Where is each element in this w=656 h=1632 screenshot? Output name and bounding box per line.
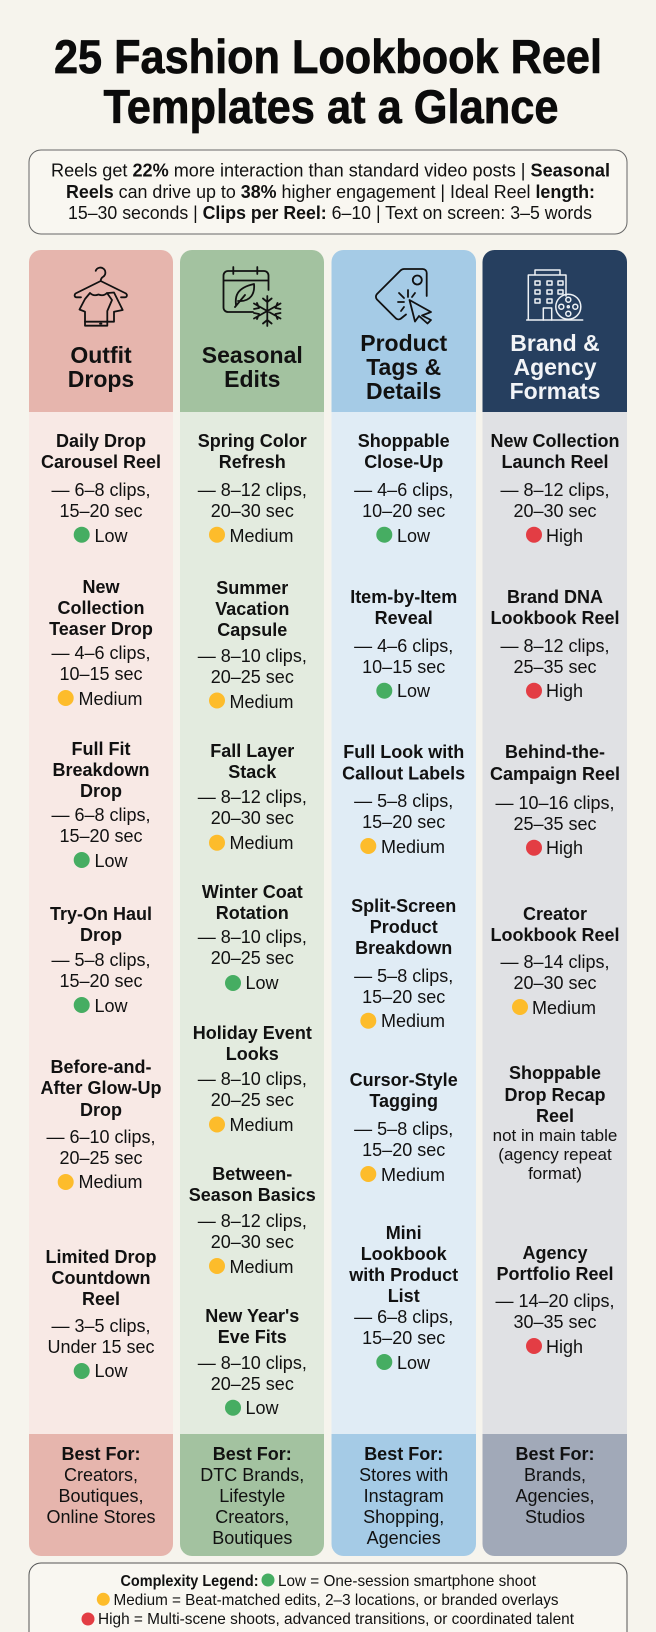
template: Between-Season Basics [189,1164,316,1277]
template: Cursor-Style Tagging: Cursor-Style [350,1070,458,1090]
template: Mini Lookbook with Product List: Lookbook [361,1244,448,1264]
template: Shoppable Drop Recap Reel: not in main table [493,1126,617,1145]
template: Spring Color Refresh: 20–30 sec [211,501,294,521]
template: Behind-the-Campaign Reel: — 10–16 clips, [495,793,615,813]
template: Fall Layer Stack [198,741,307,853]
template: Limited Drop Countdown Reel: Reel [82,1289,120,1309]
template: Try-On Haul Drop [50,904,152,1016]
template: Full Look with Callout Labels: Medium [381,837,445,857]
template: Winter Coat Rotation: Rotation [216,903,289,923]
template: Limited Drop Countdown Reel: Low [94,1361,129,1381]
panel: Outfit Drops [29,250,173,1556]
template: Split-Screen Product Breakdown: 15–20 sec [362,987,445,1007]
title [54,30,602,133]
template: Split-Screen Product Breakdown: Product [370,917,438,937]
template: New Collection Teaser Drop: 10–15 sec [59,664,143,684]
template: Spring Color Refresh: — 8–12 clips, [198,480,307,500]
template: Spring Color Refresh: Spring Color [198,431,307,451]
template: Full Fit Breakdown Drop: 15–20 sec [59,826,143,846]
template: Behind-the-Campaign Reel: Campaign Reel [490,764,620,784]
best for: Product Tags & Details: Shopping, [363,1507,444,1527]
template: New Collection Launch Reel [490,431,620,546]
template: Try-On Haul Drop: Try-On Haul [50,904,152,924]
template: Fall Layer Stack: 20–30 sec [211,808,294,828]
template: Between-Season Basics: 20–30 sec [211,1232,294,1252]
best for: Seasonal Edits [180,1434,324,1556]
template: Summer Vacation Capsule: Vacation [215,599,289,619]
best for: Product Tags & Details: Instagram [364,1486,444,1506]
template: Creator Lookbook Reel [490,904,620,1018]
template: Winter Coat Rotation [198,882,307,993]
template: Fall Layer Stack: Fall Layer [210,741,294,761]
template: New Year's Eve Fits: New Year's [205,1306,299,1326]
template: Creator Lookbook Reel: Creator [523,904,587,924]
template: New Year's Eve Fits: Low [246,1398,280,1418]
template: Shoppable Close-Up: Close-Up [364,452,443,472]
template: Split-Screen Product Breakdown: Medium [381,1011,445,1031]
template: Item-by-Item Reveal [350,587,457,701]
template: Spring Color Refresh: Medium [230,526,294,546]
template: Winter Coat Rotation: Winter Coat [202,882,303,902]
template: Summer Vacation Capsule: Summer [216,578,288,598]
template: Full Fit Breakdown Drop: Drop [80,781,122,801]
column header: Outfit Drops [29,250,173,412]
template: Full Look with Callout Labels: Full Look with [343,742,464,762]
column header: Outfit Drops: Outfit [70,342,132,368]
template: New Collection Launch Reel: High [546,526,583,546]
template: Shoppable Close-Up: — 4–6 clips, [354,480,453,500]
best for: Seasonal Edits: Lifestyle [219,1486,285,1506]
panel: Product Tags & Details [332,250,476,1556]
template: Shoppable Close-Up: Shoppable [358,431,450,451]
column header: Product Tags & Details: Product [360,330,447,356]
template: Daily Drop Carousel Reel: Daily Drop [56,431,146,451]
template: Spring Color Refresh [198,431,307,546]
template: Winter Coat Rotation: Low [246,973,280,993]
template: Full Look with Callout Labels: 15–20 sec [362,812,445,832]
template: Full Fit Breakdown Drop: Breakdown [52,760,150,780]
template: Before-and-After Glow-Up Drop: Before-and- [50,1057,152,1077]
template: Agency Portfolio Reel: Portfolio Reel [496,1264,614,1284]
icon: price tag with cursor [376,269,431,324]
panel: Seasonal Edits [180,250,324,1556]
template: Limited Drop Countdown Reel: Countdown [52,1268,150,1288]
legend: high: High = Multi-scene shoots, advanced transitions, or coordinated talent [98,1611,575,1628]
best for: Brand & Agency Formats: Agencies, [515,1486,595,1506]
stats box [29,150,627,234]
template: Limited Drop Countdown Reel [46,1247,157,1381]
template: Brand DNA Lookbook Reel: Lookbook Reel [490,608,620,628]
template: Creator Lookbook Reel: Medium [532,998,596,1018]
best for: Outfit Drops [29,1434,173,1556]
template: Brand DNA Lookbook Reel [490,587,620,701]
column header: Seasonal Edits [180,250,324,412]
template: New Collection Teaser Drop: Medium [78,689,143,709]
template: Before-and-After Glow-Up Drop [40,1057,162,1192]
template: Limited Drop Countdown Reel: — 3–5 clips, [51,1316,151,1336]
template: Agency Portfolio Reel [495,1243,615,1357]
best for: Seasonal Edits: DTC Brands, [200,1465,304,1485]
template: Winter Coat Rotation: 20–25 sec [211,948,294,968]
template: Summer Vacation Capsule: Capsule [217,620,287,640]
stats box: Reels get 22% more interaction than standard video posts | Seasonal [51,160,610,180]
template: Before-and-After Glow-Up Drop: 20–25 sec [59,1148,143,1168]
template: Summer Vacation Capsule [198,578,307,712]
template: Summer Vacation Capsule: Medium [230,692,294,712]
template: Item-by-Item Reveal: 10–15 sec [362,657,445,677]
template: Full Fit Breakdown Drop: Low [94,851,129,871]
template: Winter Coat Rotation: — 8–10 clips, [198,927,307,947]
template: Fall Layer Stack: — 8–12 clips, [198,787,307,807]
legend: low: Complexity Legend: [120,1573,258,1590]
template: Item-by-Item Reveal: — 4–6 clips, [354,636,453,656]
template: Try-On Haul Drop: Drop [80,925,122,945]
template: Limited Drop Countdown Reel: Limited Drop [46,1247,157,1267]
template: Behind-the-Campaign Reel: Behind-the- [505,742,605,762]
template: Holiday Event Looks: Holiday Event [193,1023,312,1043]
template: Mini Lookbook with Product List: Mini [386,1223,422,1243]
template: Item-by-Item Reveal: Low [397,681,431,701]
template: Holiday Event Looks [193,1023,312,1135]
best for: Seasonal Edits: Best For: [213,1444,292,1464]
template: New Collection Teaser Drop: — 4–6 clips, [51,643,151,663]
best for: Brand & Agency Formats [482,1434,627,1556]
icon: calendar with leaf and snowflake [224,267,280,326]
legend: medium: Medium = Beat-matched edits, 2–3 locations, or branded overlays [114,1592,558,1609]
template: Behind-the-Campaign Reel [490,742,620,858]
best for: Product Tags & Details: Best For: [364,1444,443,1464]
template: New Collection Launch Reel: 20–30 sec [513,501,597,521]
template: New Collection Launch Reel: Launch Reel [501,452,609,472]
template: Shoppable Drop Recap Reel: (agency repeat [498,1145,612,1164]
template: New Collection Teaser Drop: Collection [57,598,145,618]
template: Full Fit Breakdown Drop: Full Fit [72,739,130,759]
template: Mini Lookbook with Product List: 15–20 sec [362,1328,445,1348]
best for: Seasonal Edits: Creators, [215,1507,289,1527]
template: Full Look with Callout Labels: — 5–8 clips, [354,791,453,811]
title: 25 Fashion Lookbook Reel [54,30,602,83]
template: Shoppable Drop Recap Reel: format) [528,1164,582,1183]
column header: Seasonal Edits: Seasonal [202,342,303,368]
legend: low [120,1573,537,1590]
template: Daily Drop Carousel Reel: Low [94,526,129,546]
template: Cursor-Style Tagging: Medium [381,1165,445,1185]
best for: Product Tags & Details [332,1434,476,1556]
template: Cursor-Style Tagging: 15–20 sec [362,1140,445,1160]
complexity legend [29,1563,627,1632]
template: Brand DNA Lookbook Reel: Brand DNA [507,587,603,607]
template: Item-by-Item Reveal: Item-by-Item [350,587,457,607]
template: Shoppable Drop Recap Reel [493,1063,617,1183]
template: Shoppable Close-Up: Low [397,526,431,546]
template: Between-Season Basics: Medium [230,1257,294,1277]
template: Full Fit Breakdown Drop: — 6–8 clips, [51,805,151,825]
template: Split-Screen Product Breakdown: — 5–8 clips, [354,966,453,986]
template: Cursor-Style Tagging: — 5–8 clips, [354,1119,453,1139]
template: Try-On Haul Drop: — 5–8 clips, [51,950,151,970]
template: Creator Lookbook Reel: — 8–14 clips, [500,952,610,972]
template: Creator Lookbook Reel: Lookbook Reel [490,925,620,945]
template: Daily Drop Carousel Reel: — 6–8 clips, [51,480,151,500]
template: Brand DNA Lookbook Reel: 25–35 sec [513,657,597,677]
template: Full Look with Callout Labels [342,742,465,857]
template: Cursor-Style Tagging [350,1070,458,1185]
template: Before-and-After Glow-Up Drop: After Glow-Up [40,1078,162,1098]
icon: building with film reel [527,270,583,320]
template: New Year's Eve Fits: — 8–10 clips, [198,1353,307,1373]
template: Holiday Event Looks: 20–25 sec [211,1090,294,1110]
template: Split-Screen Product Breakdown: Breakdown [355,938,452,958]
template: Shoppable Close-Up [354,431,453,546]
template: New Collection Teaser Drop [49,577,153,709]
template: Agency Portfolio Reel: Agency [522,1243,588,1263]
template: Behind-the-Campaign Reel: 25–35 sec [513,814,597,834]
column header: Product Tags & Details: Details [366,378,441,404]
best for: Outfit Drops: Best For: [61,1444,141,1464]
stats box: 15–30 seconds | Clips per Reel: 6–10 | Text on screen: 3–5 words [68,203,592,223]
column body: Seasonal Edits [180,412,324,1434]
template: New Collection Launch Reel: New Collection [490,431,620,451]
template: Split-Screen Product Breakdown [351,896,456,1031]
best for: Seasonal Edits: Boutiques [212,1528,292,1548]
column header: Product Tags & Details: Tags & [366,354,441,380]
best for: Brand & Agency Formats: Best For: [515,1444,595,1464]
template: Try-On Haul Drop: 15–20 sec [59,971,143,991]
template: Full Look with Callout Labels: Callout Labels [342,764,465,784]
best for: Brand & Agency Formats: Brands, [524,1465,586,1485]
template: Mini Lookbook with Product List: List [388,1286,420,1306]
template: Shoppable Close-Up: 10–20 sec [362,501,445,521]
template: New Collection Teaser Drop: Teaser Drop [49,619,153,639]
template: Item-by-Item Reveal: Reveal [375,608,433,628]
template: Agency Portfolio Reel: 30–35 sec [513,1312,597,1332]
column header: Brand & Agency Formats: Agency [513,354,597,380]
template: Between-Season Basics: — 8–12 clips, [198,1211,307,1231]
template: Full Fit Breakdown Drop [51,739,151,871]
column header: Brand & Agency Formats [482,250,627,412]
template: Agency Portfolio Reel: — 14–20 clips, [495,1291,615,1311]
template: Mini Lookbook with Product List: Low [397,1353,431,1373]
column header: Brand & Agency Formats: Formats [510,378,600,404]
template: Summer Vacation Capsule: 20–25 sec [211,667,294,687]
template: Try-On Haul Drop: Low [94,996,129,1016]
template: Creator Lookbook Reel: 20–30 sec [513,973,597,993]
column header: Product Tags & Details [332,250,476,412]
column header: Brand & Agency Formats: Brand & [510,330,600,356]
column body: Product Tags & Details [332,412,476,1434]
template: Before-and-After Glow-Up Drop: Drop [80,1100,122,1120]
template: Daily Drop Carousel Reel: Carousel Reel [41,452,161,472]
template: Shoppable Drop Recap Reel: Shoppable [509,1063,601,1083]
template: Daily Drop Carousel Reel: 15–20 sec [59,501,143,521]
template: Mini Lookbook with Product List [348,1223,458,1373]
template: Mini Lookbook with Product List: — 6–8 clips, [354,1307,453,1327]
column header: Outfit Drops: Drops [68,366,134,392]
template: Holiday Event Looks: — 8–10 clips, [198,1069,307,1089]
template: Summer Vacation Capsule: — 8–10 clips, [198,646,307,666]
template: Holiday Event Looks: Looks [226,1044,279,1064]
template: New Year's Eve Fits: 20–25 sec [211,1374,294,1394]
template: Behind-the-Campaign Reel: High [546,838,583,858]
column body: Brand & Agency Formats [482,412,627,1434]
template: Agency Portfolio Reel: High [546,1337,583,1357]
template: Cursor-Style Tagging: Tagging [369,1091,438,1111]
template: New Collection Launch Reel: — 8–12 clips, [500,480,610,500]
best for: Brand & Agency Formats: Studios [525,1507,585,1527]
template: Before-and-After Glow-Up Drop: Medium [78,1172,143,1192]
template: Spring Color Refresh: Refresh [219,452,286,472]
panel: Brand & Agency Formats [482,250,627,1556]
template: Daily Drop Carousel Reel [41,431,161,546]
template: Shoppable Drop Recap Reel: Drop Recap [504,1085,606,1105]
title: Templates at a Glance [104,80,558,133]
column header: Seasonal Edits: Edits [224,366,280,392]
template: Shoppable Drop Recap Reel: Reel [536,1106,574,1126]
best for: Product Tags & Details: Agencies [367,1528,441,1548]
template: Between-Season Basics: Season Basics [189,1185,316,1205]
template: New Year's Eve Fits: Eve Fits [218,1327,287,1347]
best for: Outfit Drops: Creators, [64,1465,138,1485]
template: Split-Screen Product Breakdown: Split-Screen [351,896,456,916]
stats box: Reels can drive up to 38% higher engagement | Ideal Reel length: [66,182,595,202]
template: Brand DNA Lookbook Reel: — 8–12 clips, [500,636,610,656]
template: Brand DNA Lookbook Reel: High [546,681,583,701]
template: New Year's Eve Fits [198,1306,307,1418]
best for: Outfit Drops: Online Stores [46,1507,156,1527]
template: New Collection Teaser Drop: New [82,577,121,597]
template: Fall Layer Stack: Medium [230,833,294,853]
template: Fall Layer Stack: Stack [228,762,277,782]
best for: Product Tags & Details: Stores with [359,1465,448,1485]
icon: hanger with shirts [75,268,127,326]
template: Between-Season Basics: Between- [212,1164,292,1184]
template: Limited Drop Countdown Reel: Under 15 sec [47,1337,155,1357]
column body: Outfit Drops [29,412,173,1434]
legend: low: Low = One-session smartphone shoot [278,1573,537,1590]
template: Holiday Event Looks: Medium [230,1115,294,1135]
best for: Outfit Drops: Boutiques, [58,1486,144,1506]
template: Before-and-After Glow-Up Drop: — 6–10 clips, [46,1127,156,1147]
template: Mini Lookbook with Product List: with Product [348,1265,458,1285]
